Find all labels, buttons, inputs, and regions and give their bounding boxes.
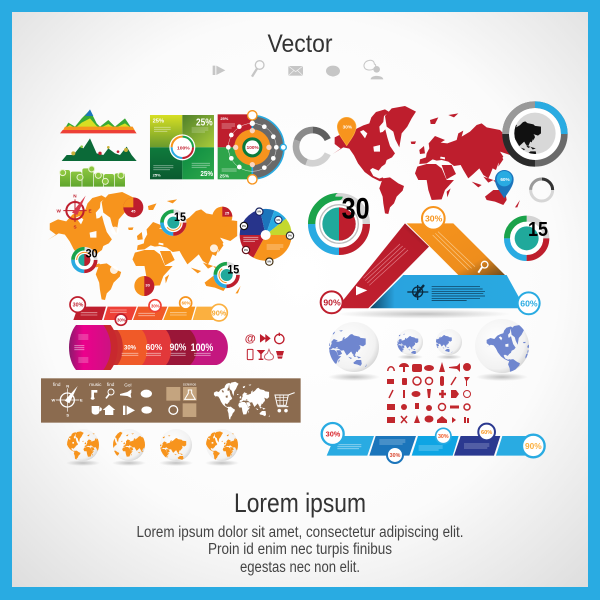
badge 30%: 30% — [425, 214, 443, 224]
footer body text: Proin id enim nec turpis finibus — [208, 541, 392, 558]
ring chart: 15 right: 15 — [528, 218, 548, 241]
icon: white compass — [51, 383, 83, 418]
triangle: red band — [337, 223, 429, 308]
icon: white compass: N — [66, 383, 69, 388]
ring chart: 15 south: 15 — [227, 262, 240, 276]
badge 30% — [422, 207, 445, 230]
ring chart: 15 south — [215, 262, 240, 286]
cylinder percentage chart: 30% — [124, 345, 137, 351]
chart: colourful pie wheel: 9% — [242, 224, 247, 228]
icon: white compass: E — [80, 397, 83, 402]
ring chart: 15 north — [162, 210, 186, 234]
badge 90% — [321, 291, 343, 313]
icon: play — [213, 66, 225, 75]
ribbon with percentage badges: 90% — [212, 308, 227, 317]
footer heading: Lorem ipsum — [234, 488, 366, 518]
icon: user with cloud — [364, 60, 383, 79]
brown icon bar: music — [89, 382, 102, 387]
icon: magnifier — [252, 61, 264, 77]
orange world map — [48, 192, 241, 300]
icon: white compass: S — [66, 413, 69, 418]
panel: green squares infographic: 25% — [153, 118, 164, 124]
red small icons: @ — [245, 333, 256, 345]
brown icon bar: Go! — [124, 382, 132, 387]
chart: colourful pie wheel: 9% — [257, 210, 262, 214]
chart: multicolour mountains — [60, 109, 137, 133]
badge 60%: 60% — [520, 299, 538, 309]
footer body text — [136, 524, 464, 576]
panel: circular orange and grey diagram: 25% — [220, 173, 230, 178]
ribbon with percentage badges: 30% — [151, 303, 160, 308]
blue pin 60%: 60% — [500, 177, 510, 182]
chart: colourful pie wheel — [240, 208, 294, 265]
cylinder percentage chart: 90% — [170, 343, 186, 354]
ring chart: 30 west: 30 — [86, 247, 98, 261]
ribbon with percentage badges: 30% — [73, 303, 84, 309]
red world map — [333, 106, 520, 214]
icon: white compass: W — [51, 397, 55, 402]
white icons grid — [91, 387, 197, 417]
ring chart: 30 large — [312, 192, 370, 251]
blue bottom ribbon: 90% — [525, 441, 542, 451]
blue globes row — [329, 322, 529, 380]
map pie markers — [110, 197, 232, 296]
icon: pencil — [356, 286, 367, 295]
small grey ring — [531, 179, 553, 201]
triangle shadow — [337, 309, 510, 319]
compass in red: E — [88, 209, 92, 214]
blue bottom ribbon: 60% — [481, 430, 492, 436]
orange pin 30% — [337, 117, 356, 146]
map pie markers: 30 — [145, 283, 151, 288]
red icon grid — [387, 362, 471, 423]
chart: green bars with badges — [60, 166, 125, 187]
ring chart: 15 north: 15 — [174, 210, 186, 224]
compass in red: N — [73, 193, 77, 198]
white world map on brown bar — [213, 382, 270, 419]
ring chart: 30 west — [73, 247, 98, 271]
orange pin 30%: 30% — [343, 125, 353, 130]
footer body text: Lorem ipsum dolor sit amet, consectetur adipiscing elit. — [136, 524, 464, 541]
triangle band text lines — [363, 232, 485, 301]
triangle: blue band — [370, 275, 525, 308]
blue bottom ribbon: 30% — [390, 453, 401, 459]
icon: magnifier — [478, 261, 488, 273]
icon: speech bubble — [326, 66, 340, 78]
ring chart: 30 large: 30 — [342, 192, 370, 225]
ring chart: 15 right — [507, 218, 548, 258]
panel: green squares infographic: 100% — [177, 145, 190, 151]
infographic cluster: top right — [296, 105, 564, 319]
brown icon bar: find — [107, 382, 115, 387]
ribbon with percentage badges: 60% — [182, 301, 190, 306]
black and white globe in ring — [502, 101, 568, 167]
cylinder percentage chart — [69, 325, 228, 370]
cylinder percentage chart: 60% — [146, 342, 163, 352]
icon: envelope — [288, 66, 303, 76]
cart icon — [275, 393, 295, 412]
blue bottom ribbon — [322, 423, 545, 463]
panel: green squares infographic: 25% — [200, 169, 213, 178]
top icon row — [213, 60, 383, 79]
compass in red: W — [56, 209, 61, 214]
footer body text: egestas nec non elit. — [240, 559, 360, 576]
brown icon bar: science — [183, 382, 197, 387]
blue pin 60% — [495, 170, 514, 198]
map pie markers: 45 — [131, 208, 136, 213]
infographic cluster: top left (zoom coordinates) — [48, 109, 294, 300]
panel: circular orange and grey diagram — [218, 111, 286, 184]
icon: compass — [407, 285, 428, 300]
chart: colourful pie wheel: 9% — [244, 248, 249, 252]
panel: circular orange and grey diagram: 25% — [220, 116, 229, 121]
panel: green squares infographic — [150, 115, 214, 179]
ribbon with percentage badges: 30% — [117, 318, 126, 323]
orange globes row — [67, 430, 238, 466]
compass in red — [56, 193, 92, 230]
blue bottom ribbon: 30% — [438, 434, 449, 440]
grey ring — [296, 130, 329, 163]
map pie markers: 25 — [225, 211, 230, 216]
panel: green squares infographic: 25% — [153, 173, 161, 178]
panel: green squares infographic: 25% — [196, 118, 213, 129]
title: Vector — [268, 30, 332, 58]
blue bottom ribbon: 30% — [326, 429, 341, 438]
brown icon bar — [41, 378, 301, 423]
triangle: orange band — [407, 223, 505, 275]
ribbon with percentage badges — [70, 297, 227, 325]
badge 90%: 90% — [323, 297, 341, 307]
panel: circular orange and grey diagram: 100% — [247, 145, 259, 150]
chart: colourful pie wheel: 9% — [276, 218, 281, 222]
chart: dark green mountains — [62, 138, 137, 161]
red small icons — [245, 333, 284, 360]
badge 60% — [518, 292, 540, 314]
compass in red: S — [73, 225, 77, 230]
infographic cluster: lower left — [41, 297, 301, 423]
chart: colourful pie wheel: 9% — [267, 260, 272, 264]
cylinder percentage chart: 100% — [191, 342, 214, 354]
chart: colourful pie wheel: 9% — [288, 234, 293, 238]
brown icon bar: find — [53, 382, 61, 387]
